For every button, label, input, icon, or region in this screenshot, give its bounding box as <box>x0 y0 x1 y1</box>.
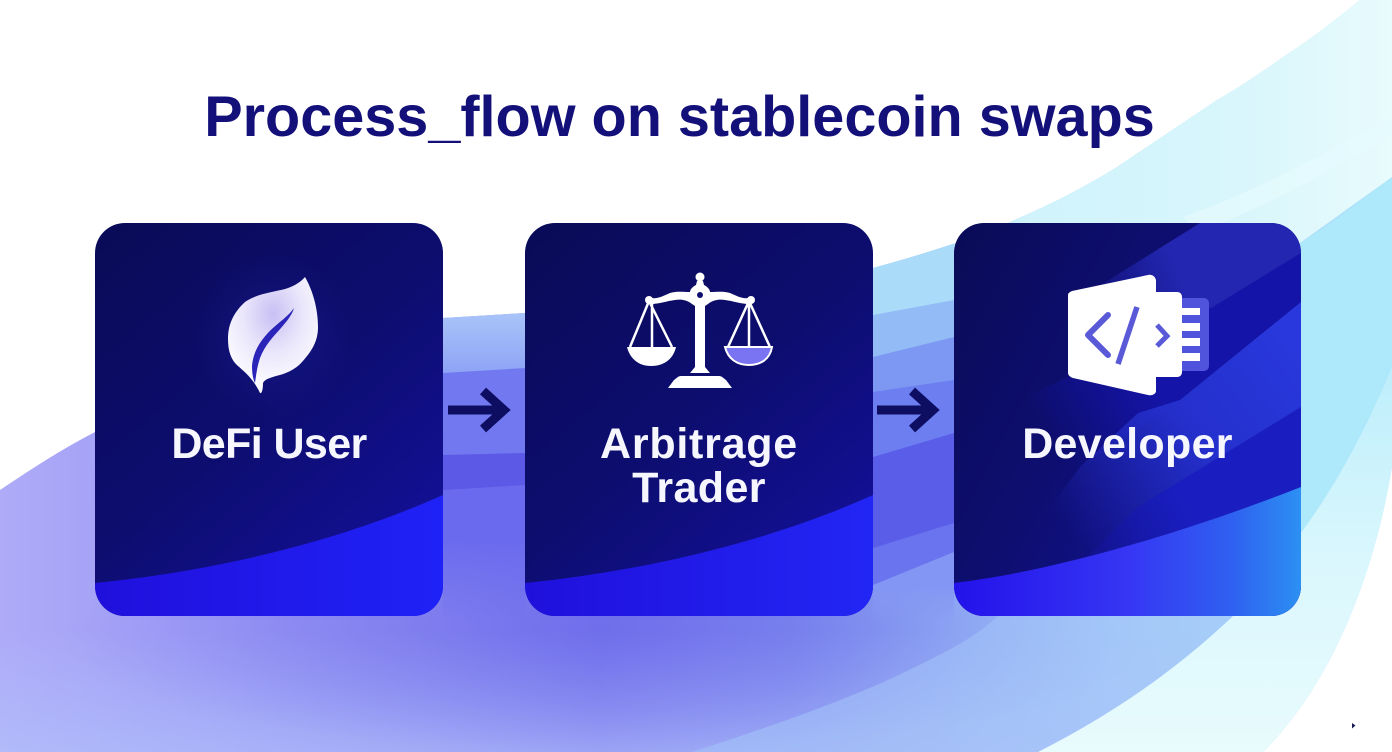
icon: balance scale <box>627 272 772 388</box>
top right pale wave <box>954 0 1392 251</box>
arrow 2 <box>877 388 940 432</box>
panel: Developer <box>954 223 1301 616</box>
panel: Arbitrage Trader <box>525 223 873 616</box>
tiny marker <box>1352 723 1356 728</box>
panel: DeFi User <box>95 223 443 616</box>
arrow 1 <box>448 388 511 432</box>
label: Arbitrage Trader: Arbitrage <box>600 420 798 468</box>
faint lower band <box>692 610 1232 752</box>
pale lower right sweep <box>1038 367 1392 752</box>
label: Arbitrage Trader <box>600 420 798 512</box>
gap 1 bands <box>443 313 525 373</box>
title: Process_flow on stablecoin swaps <box>204 85 1155 149</box>
gap 2 bands <box>873 244 954 315</box>
right cyan wave <box>1300 177 1392 532</box>
icon: leaf <box>228 277 318 393</box>
icon: code document <box>1068 275 1209 395</box>
label: DeFi User: DeFi User <box>171 420 367 468</box>
label: Developer: Developer <box>1022 420 1233 468</box>
label: Arbitrage Trader: Trader <box>632 464 766 512</box>
